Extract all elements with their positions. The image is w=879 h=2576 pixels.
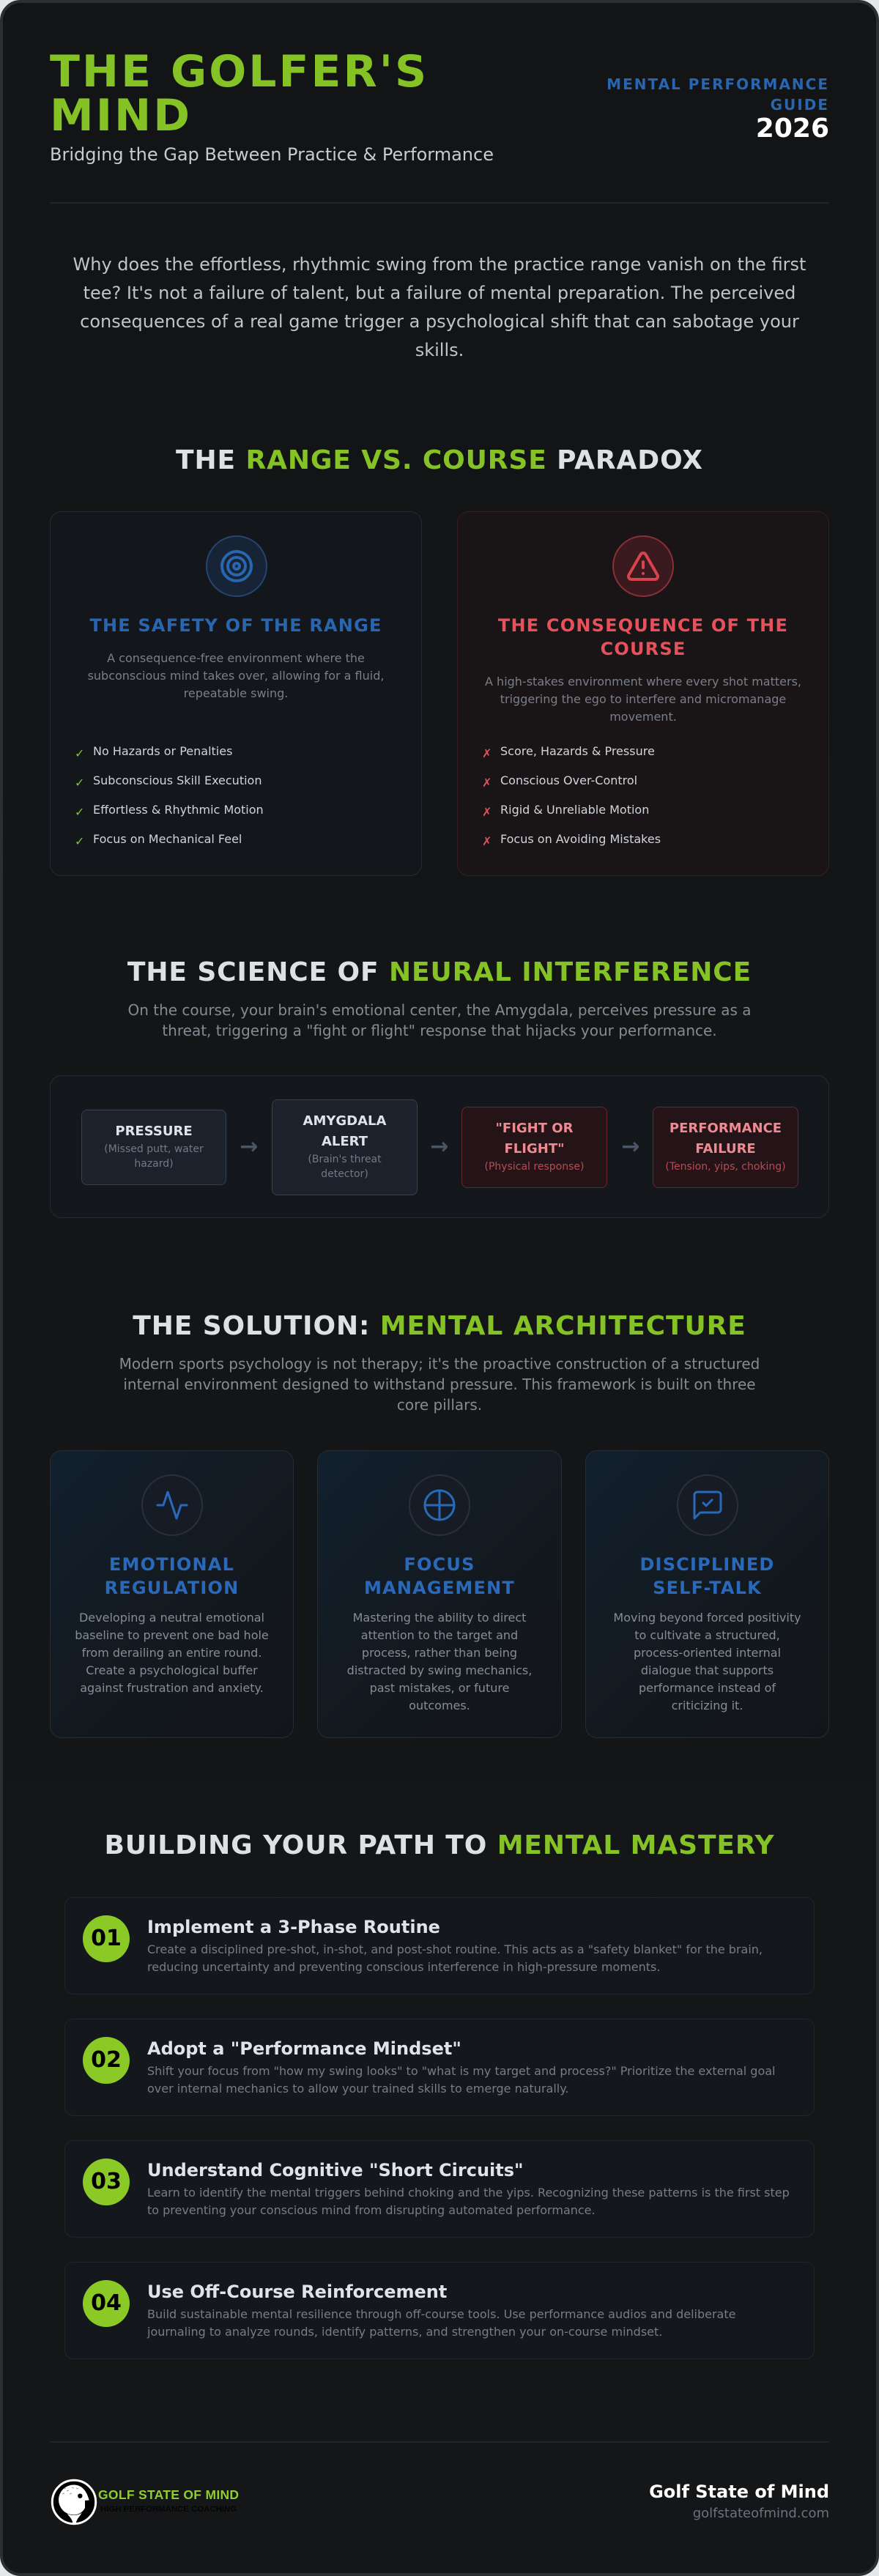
pillar description: baseline to prevent one bad hole <box>75 1628 269 1642</box>
pillar description: criticizing it. <box>672 1699 743 1712</box>
intro paragraph: skills. <box>415 340 464 360</box>
step 2 text: Shift your focus from "how my swing looks" to "what is my target and process?" Prioritize the external goal <box>147 2064 775 2078</box>
intro paragraph <box>73 254 806 360</box>
pillar heading: DISCIPLINED <box>639 1554 775 1575</box>
consequence list: ✗ <box>482 776 492 790</box>
box title: FAILURE <box>695 1141 756 1157</box>
step 1 text: reducing uncertainty and preventing conscious interference in high-pressure moments. <box>147 1960 660 1974</box>
pillar description: attention to the target and <box>361 1628 518 1642</box>
header guide label <box>607 75 829 114</box>
safety list <box>75 744 264 848</box>
box title <box>670 1121 782 1157</box>
pillar heading: FOCUS <box>404 1554 475 1575</box>
pillar heading: MANAGEMENT <box>364 1578 515 1598</box>
panel: flow chart <box>50 1075 829 1218</box>
footer brand name: Golf State of Mind <box>649 2482 829 2502</box>
pillar description: Developing a neutral emotional <box>79 1611 264 1625</box>
header title: MIND <box>50 90 192 141</box>
consequence heading <box>498 615 788 659</box>
pillar description: Create a psychological buffer <box>86 1663 258 1677</box>
intro paragraph: Why does the effortless, rhythmic swing from the practice range vanish on the first <box>73 254 806 275</box>
solution text: Modern sports psychology is not therapy; it's the proactive construction of a structured <box>119 1355 760 1373</box>
step 2 number <box>83 2037 130 2084</box>
box title: PERFORMANCE <box>670 1121 782 1136</box>
header year: 2026 <box>756 114 829 144</box>
consequence list: ✗ <box>482 805 492 819</box>
box note: (Missed putt, water <box>104 1143 204 1155</box>
pillar description <box>613 1611 801 1712</box>
pillar description: performance instead of <box>639 1681 776 1695</box>
safety description: A consequence-free environment where the <box>107 651 365 665</box>
header subtitle: Bridging the Gap Between Practice & Performance <box>50 144 494 165</box>
arrow: → <box>621 1134 640 1159</box>
footer logo wordmark: GOLF STATE OF MIND <box>98 2487 239 2502</box>
step card 2 <box>64 2019 815 2116</box>
safety description: repeatable swing. <box>184 686 288 700</box>
step 3 text: Learn to identify the mental triggers behind choking and the yips. Recognizing these patterns is the first step <box>147 2186 790 2200</box>
step 1 text: Create a disciplined pre-shot, in-shot, and post-shot routine. This acts as a "safety blanket" for the brain, <box>147 1942 763 1956</box>
pillar heading <box>105 1554 239 1598</box>
box note: (Brain's threat <box>308 1154 382 1165</box>
list item: Focus on Mechanical Feel <box>93 832 242 846</box>
flow box: amygdala alert <box>272 1099 418 1195</box>
consequence list: ✗ <box>482 746 492 760</box>
safety description <box>88 651 384 700</box>
pillar description: process-oriented internal <box>634 1646 781 1660</box>
pillar heading: EMOTIONAL <box>109 1554 234 1575</box>
icon: target <box>206 535 267 597</box>
list item: Focus on Avoiding Mistakes <box>500 832 661 846</box>
step 3 title: Understand Cognitive "Short Circuits" <box>147 2160 524 2180</box>
pillar description: outcomes. <box>409 1699 470 1712</box>
box note: detector) <box>321 1168 368 1180</box>
step 1 number <box>83 1915 130 1962</box>
panel: focus management <box>317 1450 562 1738</box>
box title: FLIGHT" <box>505 1141 564 1157</box>
consequence heading: COURSE <box>601 639 686 659</box>
box note <box>104 1143 204 1170</box>
step 1 title: Implement a 3-Phase Routine <box>147 1917 440 1937</box>
header title <box>50 46 429 141</box>
safety list: ✓ <box>75 746 84 760</box>
list item: Subconscious Skill Execution <box>93 773 262 787</box>
arrow: → <box>240 1134 259 1159</box>
step card 1 <box>64 1897 815 1994</box>
section heading: solution: THE SOLUTION: MENTAL ARCHITECTURE <box>133 1311 746 1341</box>
header guide label: GUIDE <box>771 96 829 114</box>
consequence description: triggering the ego to interfere and micromanage <box>500 692 786 706</box>
list item: Effortless & Rhythmic Motion <box>93 803 264 817</box>
safety heading: THE SAFETY OF THE RANGE <box>89 615 382 636</box>
flow box: pressure <box>81 1110 226 1185</box>
pillar description: Moving beyond forced positivity <box>613 1611 801 1625</box>
section heading: mental mastery: BUILDING YOUR PATH TO MENTAL MASTERY <box>104 1830 775 1860</box>
footer website: golfstateofmind.com <box>693 2506 829 2521</box>
box note: (Physical response) <box>485 1161 584 1173</box>
box title: AMYGDALA <box>303 1113 386 1129</box>
step 4 title: Use Off-Course Reinforcement <box>147 2282 447 2302</box>
pillar heading <box>639 1554 775 1598</box>
consequence description: movement. <box>609 710 677 724</box>
safety list: ✓ <box>75 776 84 790</box>
consequence description <box>485 675 801 724</box>
box title <box>496 1121 573 1157</box>
step card 4 <box>64 2262 815 2359</box>
neural interference text <box>127 1001 752 1039</box>
panel: emotional regulation <box>50 1450 294 1738</box>
step card 3 <box>64 2140 815 2238</box>
icon: warning triangle <box>612 535 674 597</box>
box title <box>303 1113 387 1149</box>
solution text: internal environment designed to withstand pressure. This framework is built on three <box>123 1376 756 1393</box>
icon: crosshair circle <box>409 1474 470 1536</box>
list item: Conscious Over-Control <box>500 773 637 787</box>
pillar description: against frustration and anxiety. <box>80 1681 264 1695</box>
neural interference text: threat, triggering a "fight or flight" response that hijacks your performance. <box>162 1022 717 1039</box>
pillar description: dialogue that supports <box>641 1663 774 1677</box>
header title: THE GOLFER'S <box>50 46 429 97</box>
step 3 number: 03 <box>91 2169 122 2194</box>
panel: safety of the range <box>50 511 422 876</box>
pillar description: from derailing an entire round. <box>82 1646 262 1660</box>
step 3 text <box>147 2186 790 2217</box>
section heading: neural interference: THE SCIENCE OF NEURAL INTERFERENCE <box>127 957 752 987</box>
step 4 text: journaling to analyze rounds, identify patterns, and strengthen your on-course mindset. <box>147 2325 662 2339</box>
icon: speech bubble check <box>677 1474 738 1536</box>
pillar description: process, rather than being <box>362 1646 517 1660</box>
list item: Score, Hazards & Pressure <box>500 744 655 758</box>
consequence description: A high-stakes environment where every shot matters, <box>485 675 801 688</box>
list item: No Hazards or Penalties <box>93 744 232 758</box>
footer logo icon <box>51 2479 97 2525</box>
flow box: fight or flight <box>461 1107 607 1188</box>
box title: "FIGHT OR <box>496 1121 573 1136</box>
pillar description <box>75 1611 269 1695</box>
solution text: core pillars. <box>397 1396 482 1414</box>
box title: ALERT <box>322 1134 368 1149</box>
pillar heading: REGULATION <box>105 1578 239 1598</box>
box note <box>308 1154 382 1180</box>
consequence list: ✗ <box>482 834 492 848</box>
neural interference text: On the course, your brain's emotional center, the Amygdala, perceives pressure as a <box>127 1001 752 1019</box>
panel: disciplined self-talk <box>585 1450 829 1738</box>
step 4 number: 04 <box>91 2290 122 2316</box>
header guide label: MENTAL PERFORMANCE <box>607 75 829 93</box>
step 4 text: Build sustainable mental resilience through off-course tools. Use performance audios and deliberate <box>147 2307 735 2321</box>
panel: consequence of the course <box>457 511 829 876</box>
footer logo tagline: HIGH PERFORMANCE COACHING <box>100 2505 237 2514</box>
section heading: paradox: THE RANGE VS. COURSE PARADOX <box>176 445 703 475</box>
safety list: ✓ <box>75 805 84 819</box>
step 4 text <box>146 2307 735 2339</box>
step 4 number <box>83 2280 130 2327</box>
pillar description: past mistakes, or future <box>370 1681 509 1695</box>
pillar heading: SELF-TALK <box>653 1578 762 1598</box>
consequence heading: THE CONSEQUENCE OF THE <box>498 615 788 636</box>
intro paragraph: tee? It's not a failure of talent, but a failure of mental preparation. The perceived <box>84 283 795 303</box>
step 2 text <box>147 2064 775 2096</box>
solution text <box>119 1355 760 1414</box>
step 1 text <box>147 1942 763 1974</box>
icon: pulse <box>141 1474 203 1536</box>
list item: Rigid & Unreliable Motion <box>500 803 649 817</box>
box note: hazard) <box>134 1158 174 1170</box>
step 3 number <box>83 2159 130 2205</box>
safety list: ✓ <box>75 834 84 848</box>
consequence list <box>482 744 661 848</box>
pillar description: to cultivate a structured, <box>634 1628 780 1642</box>
safety description: subconscious mind takes over, allowing for a fluid, <box>88 669 384 683</box>
pillar description <box>347 1611 532 1712</box>
flow box: performance failure <box>653 1107 798 1188</box>
arrow: → <box>430 1134 449 1159</box>
pillar description: Mastering the ability to direct <box>353 1611 526 1625</box>
box title: PRESSURE <box>115 1124 193 1139</box>
step 2 number: 02 <box>91 2047 122 2073</box>
step 1 number: 01 <box>91 1926 122 1951</box>
intro paragraph: consequences of a real game trigger a psychological shift that can sabotage your <box>80 311 799 332</box>
step 3 text: to preventing your conscious mind from disrupting automated performance. <box>147 2203 596 2217</box>
box note: (Tension, yips, choking) <box>665 1161 786 1173</box>
step 2 title: Adopt a "Performance Mindset" <box>147 2038 461 2059</box>
pillar heading <box>364 1554 515 1598</box>
step 2 text: over internal mechanics to allow your trained skills to emerge naturally. <box>147 2082 568 2096</box>
pillar description: distracted by swing mechanics, <box>347 1663 532 1677</box>
